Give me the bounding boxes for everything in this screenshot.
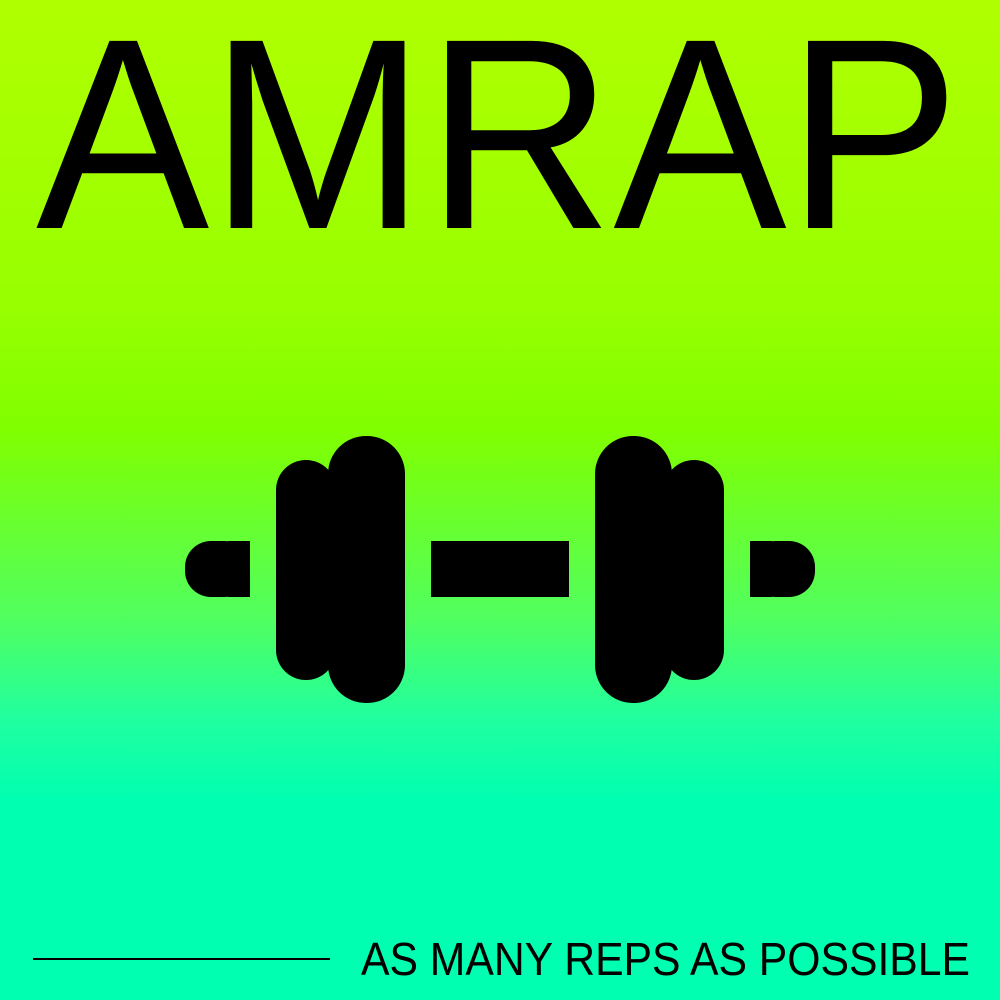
subtitle line <box>33 958 330 960</box>
subtitle: AS MANY REPS AS POSSIBLE <box>361 933 970 985</box>
icon: dumbbell <box>185 436 815 703</box>
